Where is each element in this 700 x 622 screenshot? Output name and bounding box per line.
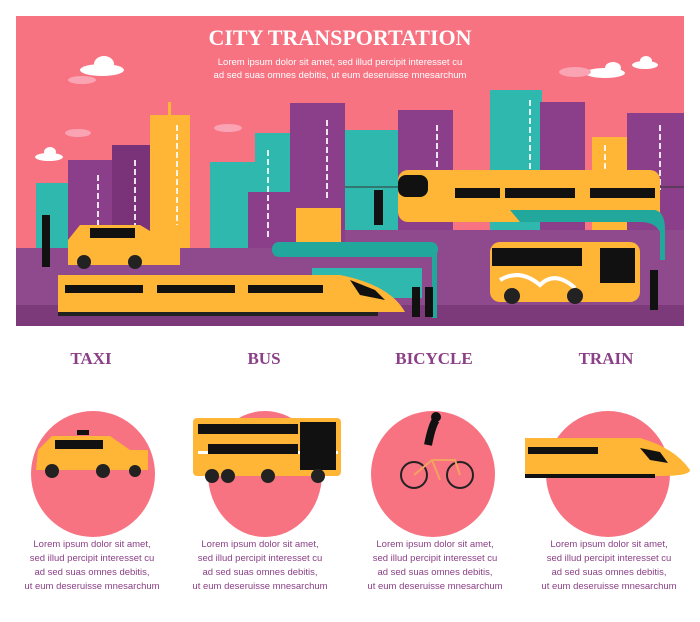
person (42, 215, 50, 267)
shelter (272, 242, 438, 318)
headings: TAXI (70, 349, 112, 368)
descriptions: sed illud percipit interesset cu (547, 553, 671, 564)
headings: TRAIN (579, 349, 634, 368)
icon: bicycle (401, 412, 473, 488)
icon: train (525, 438, 690, 478)
circles (31, 411, 670, 537)
icon: bus (193, 418, 341, 483)
headings (70, 349, 634, 368)
title: CITY TRANSPORTATION (208, 25, 472, 50)
tram (398, 170, 660, 222)
descriptions: ut eum deseruisse mnesarchum (367, 581, 503, 592)
buildings (36, 90, 684, 273)
descriptions: ad sed suas omnes debitis, (202, 567, 318, 578)
descriptions: ut eum deseruisse mnesarchum (541, 581, 677, 592)
descriptions: ut eum deseruisse mnesarchum (24, 581, 160, 592)
bus (490, 242, 640, 304)
train (58, 275, 405, 316)
descriptions: ad sed suas omnes debitis, (551, 567, 667, 578)
subtitle (214, 57, 467, 81)
descriptions (24, 539, 677, 592)
descriptions: Lorem ipsum dolor sit amet, (33, 539, 151, 550)
subtitle: Lorem ipsum dolor sit amet, sed illud percipit interesset cu (218, 57, 462, 68)
descriptions: sed illud percipit interesset cu (373, 553, 497, 564)
descriptions: sed illud percipit interesset cu (198, 553, 322, 564)
descriptions: sed illud percipit interesset cu (30, 553, 154, 564)
taxi (68, 225, 180, 269)
headings: BUS (247, 349, 281, 368)
descriptions: Lorem ipsum dolor sit amet, (376, 539, 494, 550)
descriptions: ut eum deseruisse mnesarchum (192, 581, 328, 592)
headings: BICYCLE (395, 349, 473, 368)
descriptions: Lorem ipsum dolor sit amet, (201, 539, 319, 550)
banner (16, 16, 684, 326)
icon: taxi (36, 430, 148, 478)
people (374, 190, 658, 317)
subtitle: ad sed suas omnes debitis, ut eum deseruisse mnesarchum (214, 70, 467, 81)
descriptions: ad sed suas omnes debitis, (34, 567, 150, 578)
descriptions: Lorem ipsum dolor sit amet, (550, 539, 668, 550)
platform (510, 210, 665, 260)
descriptions: ad sed suas omnes debitis, (377, 567, 493, 578)
clouds (35, 56, 658, 161)
ground (16, 248, 684, 326)
